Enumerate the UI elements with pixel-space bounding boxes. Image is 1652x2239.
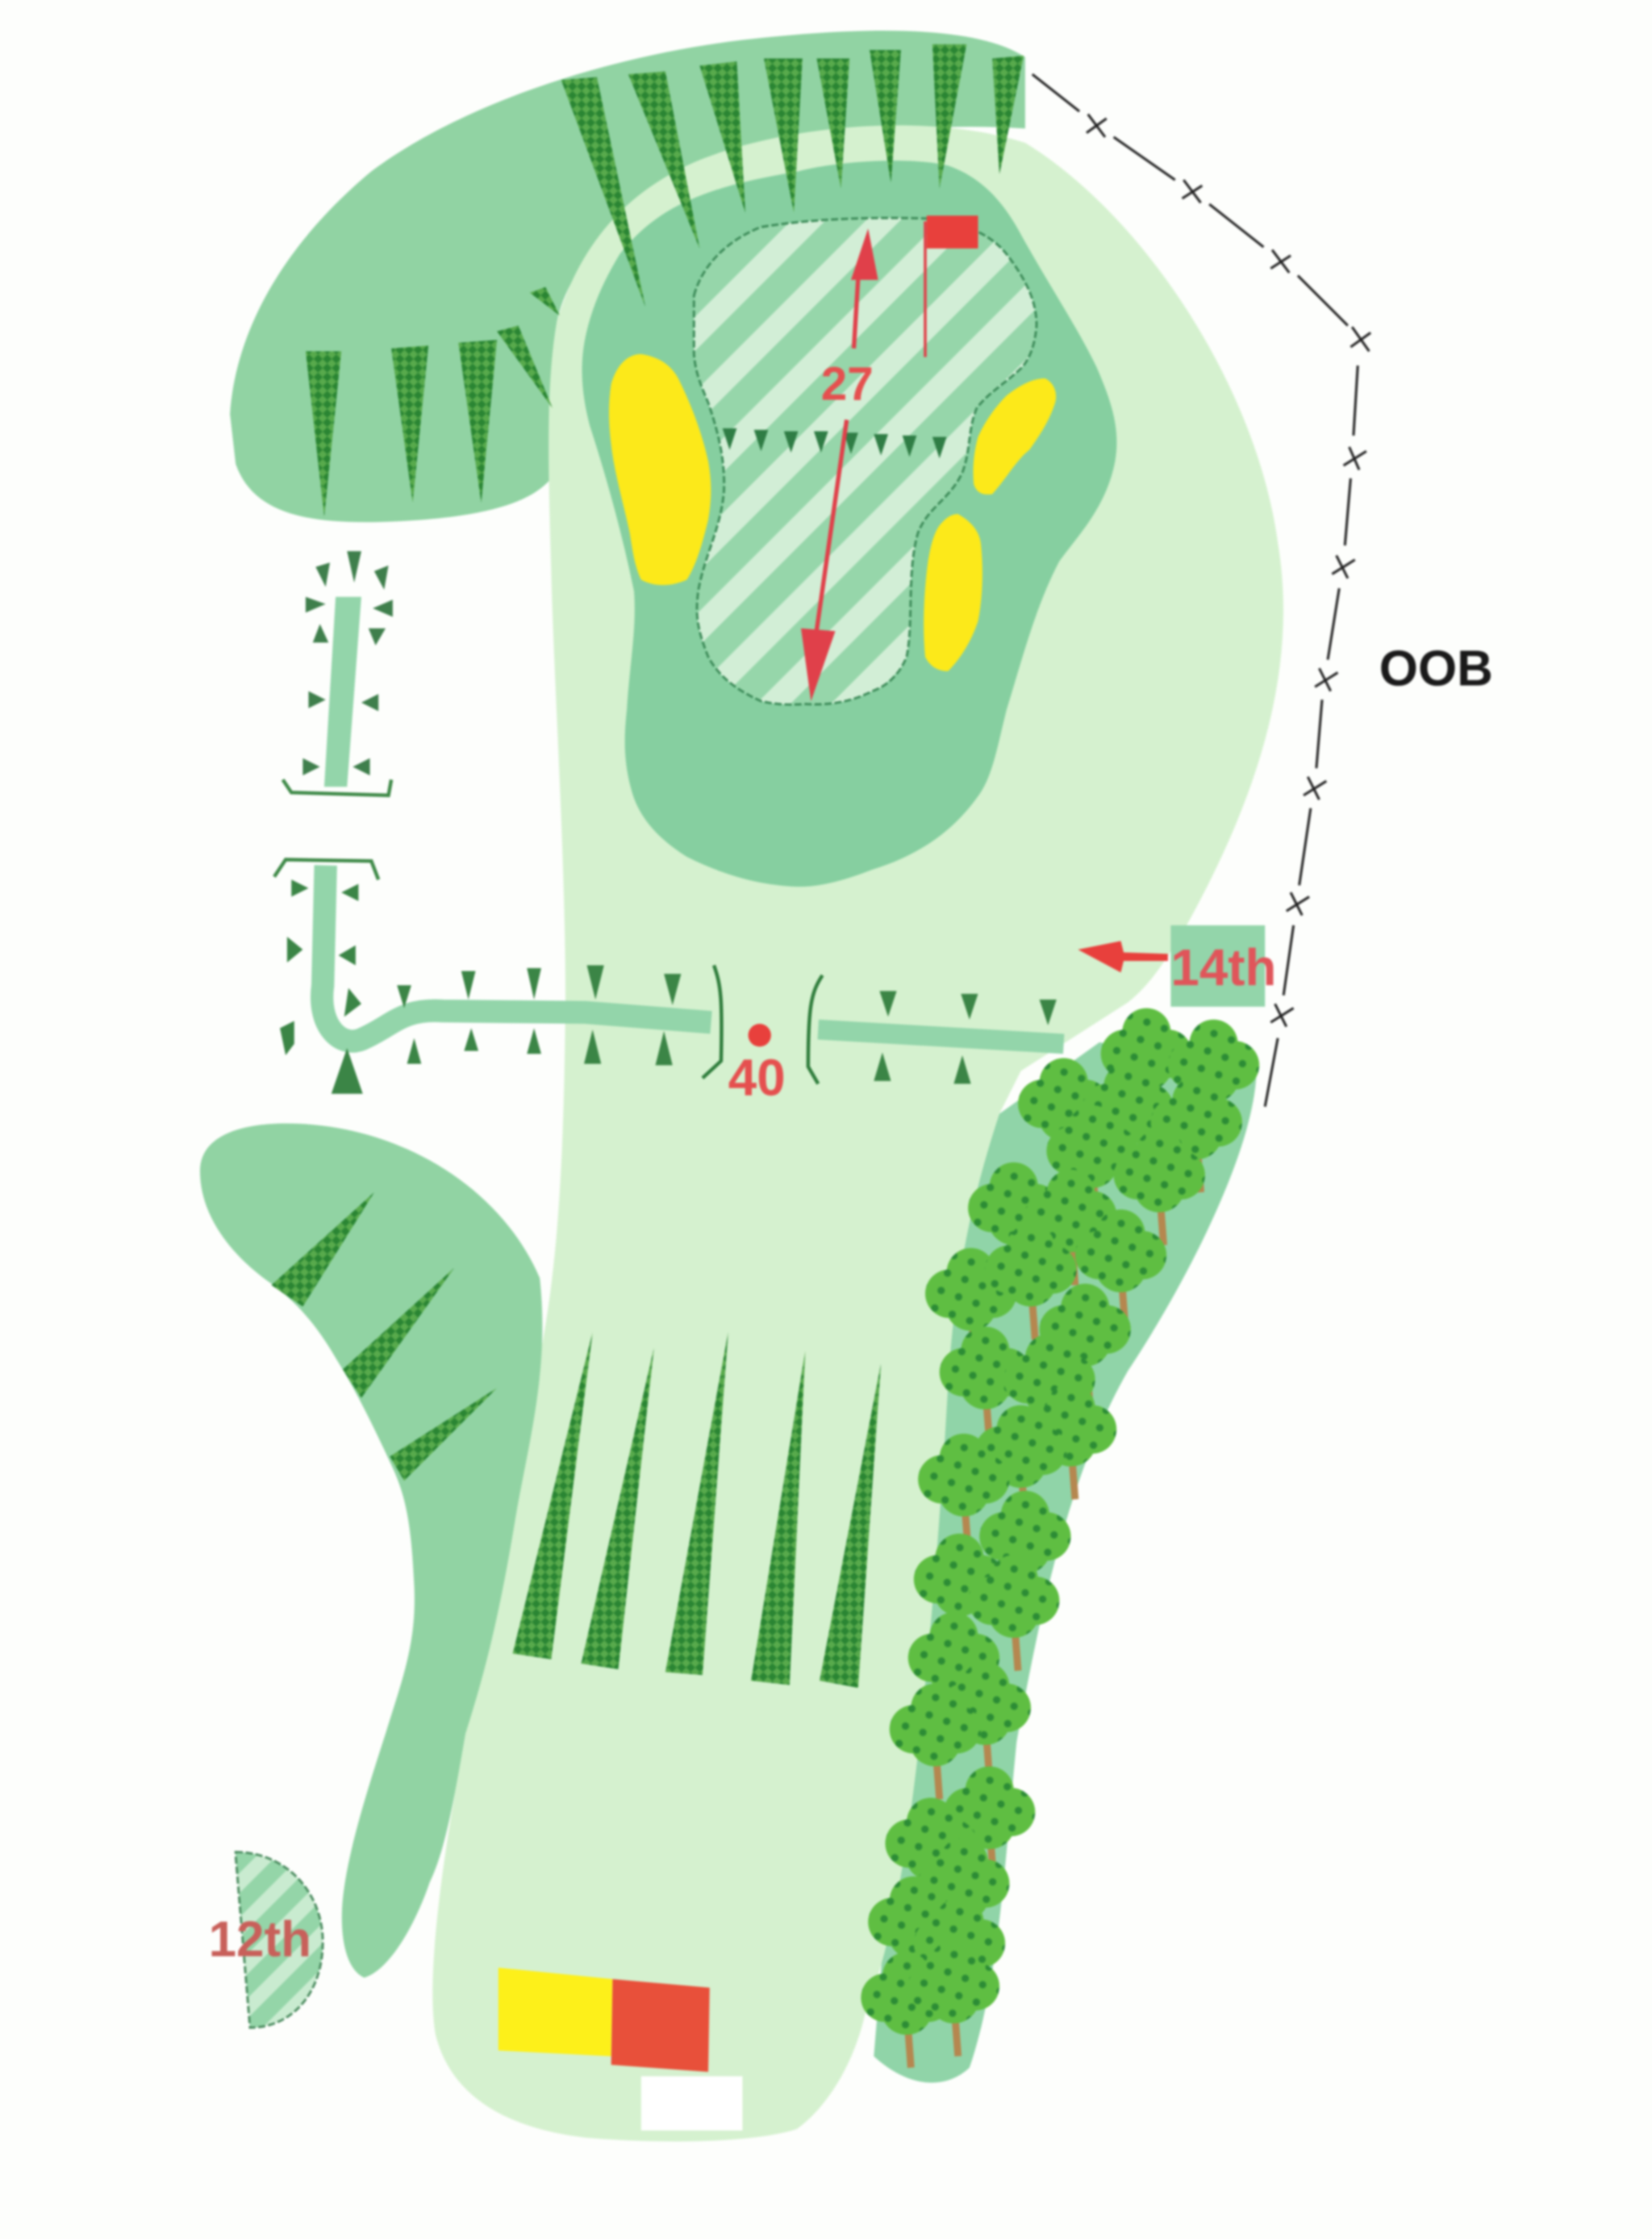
cart path: lower right section [818,1030,1064,1044]
bunker: left [609,354,711,585]
bunker: lower right [924,514,982,671]
cart path: upper brackets [283,779,391,796]
rough: upper left band [230,31,1025,522]
cart path: upper section [324,597,361,787]
cart path markers: lower section [280,879,1057,1094]
arrow to 14th [1078,941,1168,972]
green collar [582,161,1116,887]
cart path markers: upper section [302,551,393,775]
crossing brackets [703,965,823,1084]
label: 40: 40 [728,1048,786,1106]
tufts: fairway [513,1332,881,1688]
flag [925,215,978,357]
trees along right side [861,1008,1259,2068]
rough: right strip beside trees [874,1042,1257,2082]
label: 12th: 12th [209,1912,311,1968]
tee-to-green marker dot [749,1024,771,1046]
tree line across green [723,428,947,458]
green depth arrow [801,228,878,701]
rough: lower left mound [200,1123,542,1978]
label: 27: 27 [821,358,874,411]
out of bounds fence [1032,74,1370,1107]
tee: yellow [499,1968,612,2056]
fairway [432,125,1283,2141]
bunker: upper right [974,378,1056,495]
tufts: lower left mound [271,1193,497,1481]
tee: white [641,2076,742,2130]
neighbouring green: 12th [236,1852,323,2028]
cart path: top bracket [274,859,378,879]
label: 14th: 14th [1170,938,1276,996]
cart path: lower left section [322,865,711,1041]
neighbouring green: 14th [1170,925,1265,1007]
tee: red [611,1979,710,2072]
tufts: left of band [306,287,560,517]
label: OOB: OOB [1379,641,1493,696]
tufts: top band [561,44,1024,307]
putting green with stripes [694,218,1037,704]
